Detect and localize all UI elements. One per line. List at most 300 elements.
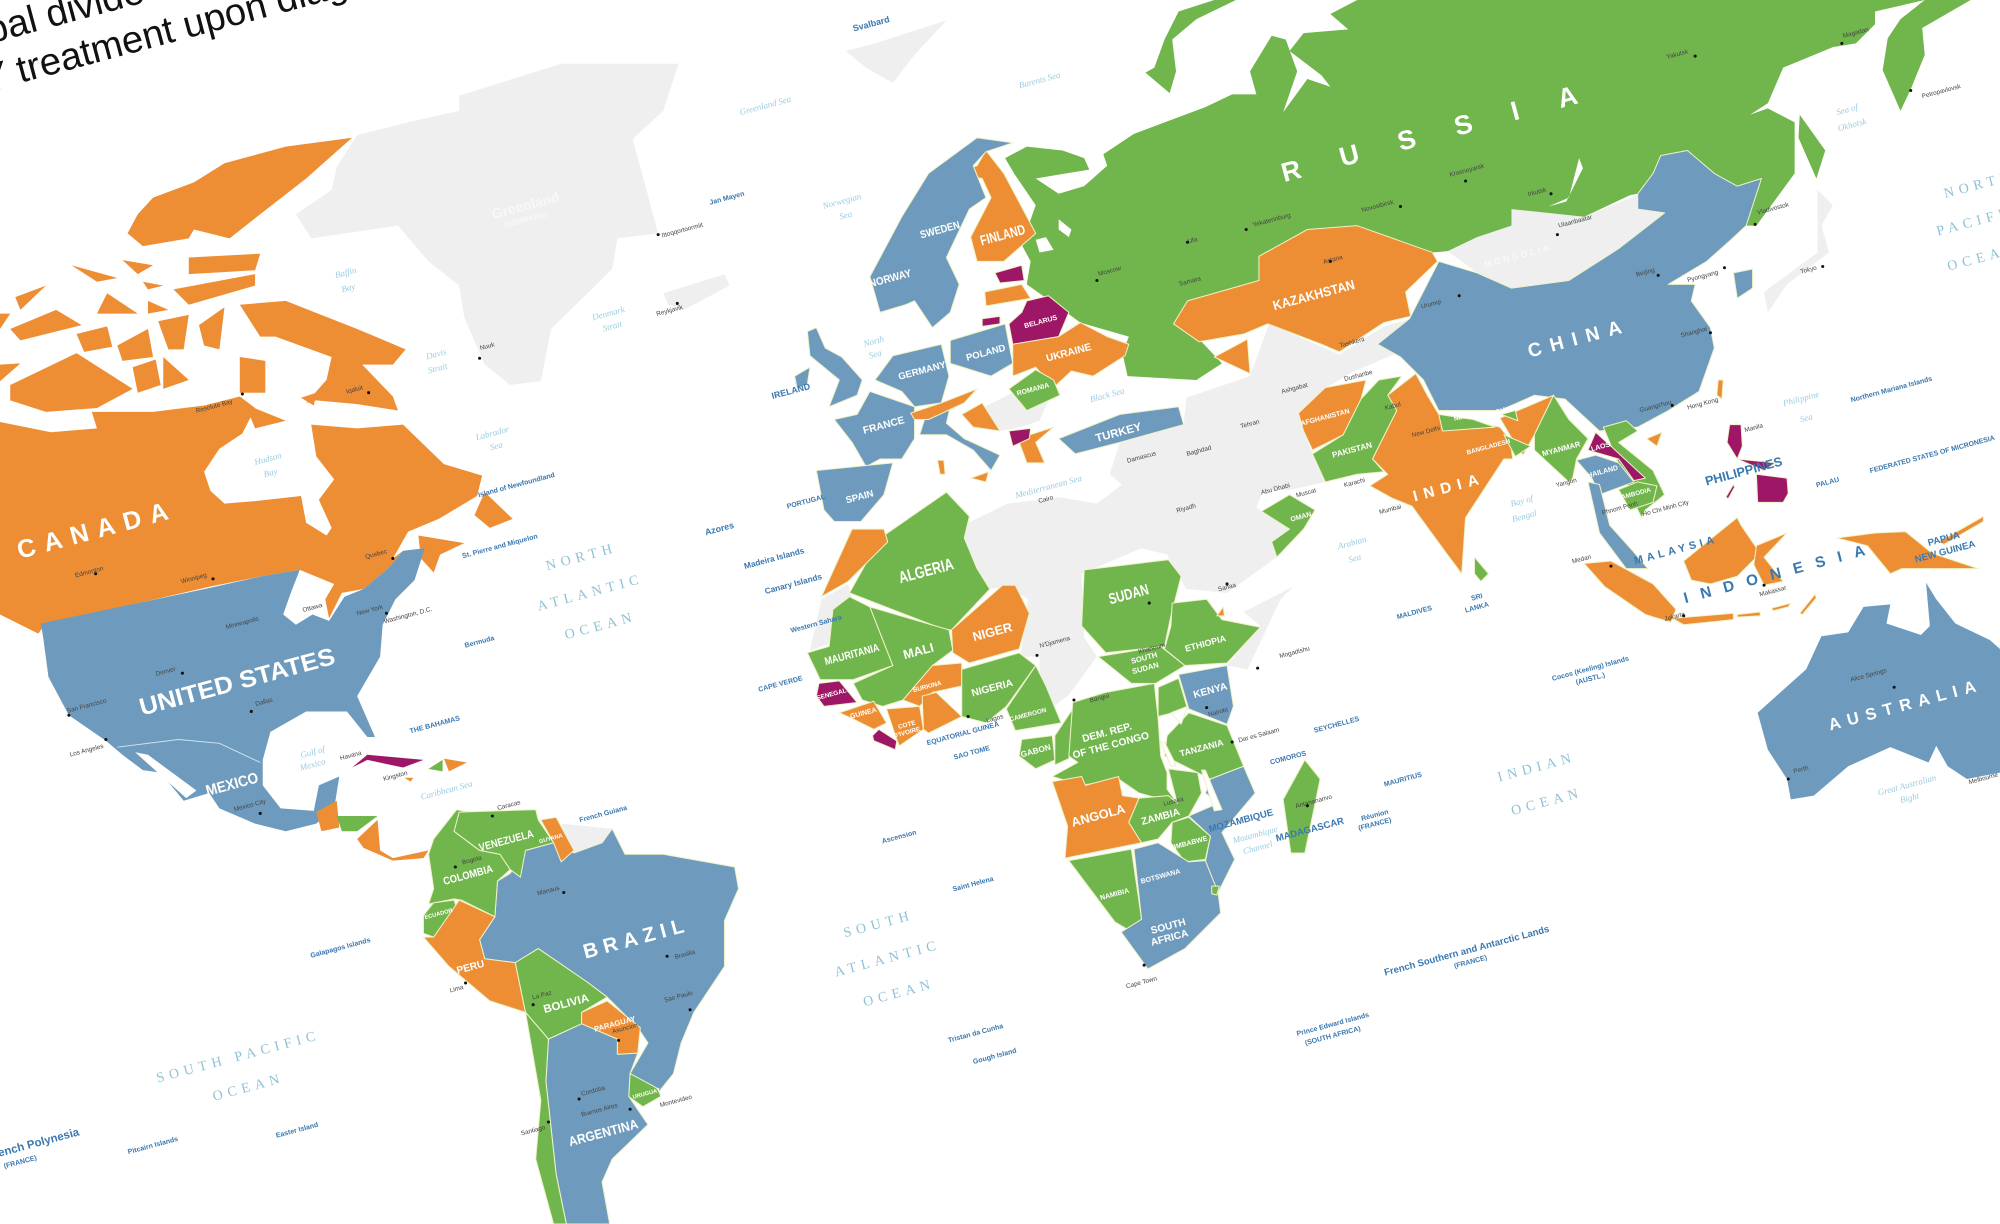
city labels: Bogota [461, 854, 483, 866]
sea and ocean labels: Sea [868, 347, 883, 361]
Corsica [938, 460, 945, 474]
sea and ocean labels: Sea [1347, 551, 1363, 565]
Greece [1018, 427, 1054, 463]
Sudan [1082, 560, 1181, 653]
city labels: Reykjavik [656, 304, 684, 318]
city labels: Nuuk [479, 341, 496, 352]
Kenya [1179, 666, 1233, 724]
blue external country labels: St. Pierre and Miquelon [462, 533, 538, 560]
blue external country labels: (FRANCE) [1453, 955, 1488, 970]
city labels: Tashkent [1339, 336, 1365, 349]
sea and ocean labels: North [861, 334, 886, 349]
sea and ocean labels: Barents Sea [1018, 69, 1062, 90]
city labels: Manila [1744, 422, 1764, 434]
city labels: Washington, D.C. [383, 606, 433, 625]
country name labels: OF THE CONGO [1072, 730, 1150, 761]
sea and ocean labels: Sea [489, 439, 504, 452]
city labels: Montevideo [659, 1094, 693, 1109]
city labels: Kingston [383, 770, 409, 783]
blue external country labels: Tristan da Cunha [947, 1023, 1004, 1045]
city labels: Lagos [986, 713, 1004, 724]
country name labels: D'IVOIRE [893, 726, 921, 740]
city labels: Cordoba [580, 1085, 606, 1098]
country name labels: RUSSIA [1278, 69, 1620, 188]
city labels: Winnipeg [180, 572, 208, 585]
Congo [1055, 709, 1073, 765]
blue external country labels: COMOROS [1270, 750, 1307, 767]
blue external country labels: IRELAND [770, 381, 812, 401]
country name labels: NEPAL [1453, 411, 1475, 423]
sea and ocean labels: OCEAN [563, 610, 638, 643]
country name labels: Greenland [490, 189, 561, 222]
country name labels: GUYANA [539, 833, 564, 845]
Ireland [795, 367, 810, 389]
city labels: Edmonton [74, 565, 105, 579]
Cambodia [1619, 482, 1657, 510]
country name labels: SUDAN [1107, 581, 1151, 608]
Angola [1052, 776, 1142, 858]
city labels: Denver [155, 666, 177, 678]
Caribbean [352, 755, 467, 782]
Kaliningrad [982, 316, 1000, 326]
city labels: Shanghai [1680, 326, 1708, 339]
city labels: Cape Town [1125, 975, 1158, 990]
country name labels: MAURITANIA [823, 642, 881, 668]
blue external country labels: SRI [1470, 593, 1484, 603]
city labels: Yakutsk [1666, 48, 1690, 61]
Djibouti [1217, 607, 1224, 616]
blue external country labels: Prince Edward Islands [1296, 1012, 1370, 1038]
country name labels: MYANMAR [1541, 439, 1582, 458]
blue external country labels: Madeira Islands [743, 546, 806, 571]
country name labels: ROMANIA [1016, 382, 1050, 398]
blue external country labels: Ascension [881, 829, 917, 845]
blue external country labels: Réunion [1361, 809, 1389, 823]
city labels: Astana [1322, 254, 1344, 266]
city labels: Baghdad [1186, 444, 1213, 458]
United Kingdom [807, 328, 862, 407]
Nigeria [962, 653, 1036, 723]
country name labels: MALI [901, 640, 935, 662]
blue external country labels: Azores [704, 520, 735, 537]
Taiwan [1717, 380, 1723, 399]
sea and ocean labels: Bay [340, 281, 356, 294]
United States and Mexico [41, 548, 425, 831]
city labels: Hong Kong [1687, 396, 1720, 412]
sea and ocean labels: Baffin [334, 265, 358, 280]
Bhutan [1501, 411, 1518, 421]
country name labels: AFRICA [1150, 928, 1190, 949]
country name labels: GABON [1020, 743, 1052, 759]
Africa [807, 492, 1320, 969]
US Mexico border [117, 740, 260, 762]
country name labels: SPAIN [845, 488, 875, 506]
sea and ocean labels: Sea of [1835, 101, 1860, 117]
sea and ocean labels: Mediterranean Sea [1013, 473, 1083, 500]
blue external country labels: Svalbard [852, 14, 891, 33]
country name labels: TURKEY [1094, 421, 1143, 445]
Norway and Sweden [870, 138, 1013, 328]
blue external country labels: Island of Newfoundland [478, 472, 556, 499]
Brazil [480, 829, 739, 1093]
blue external country labels: (AUSTL.) [1575, 672, 1606, 687]
blue external country labels: EQUATORIAL GUINEA [926, 721, 1000, 747]
Europe [795, 138, 1184, 521]
blue external country labels: (SOUTH AFRICA) [1304, 1026, 1361, 1047]
Indonesia and Papua New Guinea [1584, 516, 1983, 625]
west Kazakhstan strip [1214, 339, 1250, 374]
Madagascar [1283, 760, 1320, 853]
Balkans [962, 403, 1000, 431]
Mali [853, 607, 953, 706]
sea and ocean labels: Gulf of [299, 744, 327, 760]
Hainan [1647, 432, 1662, 446]
sea and ocean labels: SOUTH PACIFIC [155, 1028, 322, 1086]
Ecuador [423, 900, 457, 937]
Swaziland [1212, 886, 1219, 895]
Lake Victoria [1171, 706, 1188, 724]
Cameroon [1006, 666, 1061, 731]
city labels: Cairo [1038, 494, 1055, 505]
city labels: Bangui [1089, 693, 1110, 704]
sea and ocean labels: Strait [427, 361, 449, 375]
country name labels: ARGENTINA [567, 1116, 640, 1149]
sea and ocean labels [155, 69, 2000, 1105]
sea and ocean labels: Channel [1242, 839, 1274, 856]
Finland [950, 150, 1036, 261]
country name labels: AFGHANISTAN [1300, 408, 1351, 428]
city labels: Lima [449, 984, 465, 994]
country name labels: PARAGUAY [593, 1014, 636, 1034]
Kazakhstan [1173, 226, 1438, 352]
Senegal [816, 681, 857, 706]
blue external country labels: Easter Island [275, 1122, 319, 1140]
sea and ocean labels: Denmark [590, 304, 627, 323]
blue external country labels: MADAGASCAR [1275, 816, 1345, 844]
sea and ocean labels: Bay of [1509, 493, 1536, 509]
sea and ocean labels: Strait [601, 318, 624, 333]
Ethiopia [1165, 599, 1260, 666]
North America [0, 138, 513, 861]
country name labels: BURKINA [912, 680, 943, 694]
blue external country labels: FEDERATED STATES OF MICRONESIA [1869, 435, 1996, 475]
Bangladesh [1504, 435, 1531, 456]
city labels: Dallas [255, 697, 273, 708]
city labels: Quebec [365, 548, 389, 561]
Ghana Togo Benin [922, 692, 962, 733]
city labels: Melbourne [1968, 771, 1999, 786]
France [834, 391, 915, 467]
country name labels: AUSTRALIA [1826, 675, 1985, 734]
blue external country labels: Galapagos Islands [310, 937, 371, 960]
country name labels: BANGLADESH [1466, 438, 1511, 457]
sea and ocean labels: Norwegian [820, 191, 863, 211]
country name labels: ANGOLA [1070, 801, 1127, 830]
city labels: Ho Chi Minh City [1642, 499, 1691, 518]
sea and ocean labels: Philippine [1781, 389, 1820, 408]
China [1378, 150, 1761, 431]
city labels: Karachi [1343, 477, 1366, 489]
city labels: Guangzhou [1639, 399, 1673, 414]
city labels: Kabul [1384, 401, 1402, 412]
country name labels: URUGUAY [632, 1088, 661, 1101]
country name labels: SOUTH [1150, 917, 1187, 937]
country name labels: COLOMBIA [442, 863, 494, 888]
blue external country labels: Cocos (Keeling) Islands [1551, 655, 1630, 683]
country name labels: CANADA [14, 495, 180, 565]
country name labels: MEXICO [204, 770, 260, 800]
Namibia [1069, 849, 1142, 929]
city labels: Los Angeles [69, 743, 104, 759]
blue external country labels: French Guiana [579, 805, 628, 824]
sea and ocean labels: Bengal [1511, 508, 1538, 524]
sea and ocean labels: SOUTH [842, 908, 916, 941]
country name labels: SWEDEN [919, 219, 961, 241]
Colombia [429, 810, 510, 917]
country name labels: LAOS [1590, 441, 1611, 453]
country name labels: BHUTAN [1495, 402, 1523, 416]
Paraguay [582, 1001, 640, 1054]
city labels: Sanaa [1217, 582, 1237, 593]
city labels: New York [356, 604, 385, 617]
city labels: Khartoum [1138, 642, 1166, 656]
city labels: Medan [1571, 554, 1592, 565]
country name labels: BELARUS [1024, 315, 1058, 330]
sea and ocean labels: Greenland Sea [738, 94, 793, 117]
city labels: Magadan [1842, 26, 1870, 40]
country name labels: ALGERIA [896, 554, 956, 587]
Argentina [546, 1024, 648, 1224]
Zimbabwe [1171, 817, 1210, 862]
blue external country labels: MAURITIUS [1383, 772, 1423, 789]
Pakistan [1312, 376, 1402, 482]
sea and ocean labels: Great Australian [1877, 772, 1938, 798]
Oman [1261, 495, 1315, 557]
city labels: Irkutsk [1527, 186, 1548, 198]
Lake Malawi [1202, 770, 1222, 811]
city labels: Antananarivo [1295, 793, 1333, 810]
blue external country labels: (FRANCE) [3, 1155, 38, 1170]
sea and ocean labels: Sea [1799, 411, 1814, 424]
country name labels: SUDAN [1131, 660, 1160, 676]
country name labels: OMAN [1290, 511, 1312, 524]
blue external country labels: Pitcairn Islands [127, 1136, 179, 1156]
blue external country labels: CAPE VERDE [758, 675, 804, 694]
Estonia [995, 265, 1024, 283]
blue external country labels: MALAYSIA [1633, 533, 1719, 567]
blue external country labels: Saint Helena [952, 876, 995, 893]
Guinea [839, 701, 886, 729]
country name labels: CAMBODIA [1616, 487, 1652, 502]
sea and ocean labels: Bight [1899, 790, 1921, 805]
city labels: Dar es Salaam [1238, 727, 1280, 744]
city labels: Tehran [1240, 418, 1261, 430]
country name labels: TANZANIA [1179, 737, 1225, 759]
country name labels: CHINA [1526, 315, 1633, 362]
Ivory Coast [886, 706, 923, 746]
city labels: Tokyo [1800, 264, 1818, 276]
no-data countries in grey [296, 20, 1833, 853]
country name labels: BOLIVIA [542, 992, 590, 1016]
city labels: Asuncion [611, 1022, 639, 1036]
Nepal [1439, 414, 1495, 431]
city labels: Resolute Bay [195, 398, 234, 415]
country name labels: GUINEA [849, 707, 878, 721]
city labels: Samara [1178, 275, 1202, 288]
city labels: Urumqi [1420, 298, 1442, 311]
Mauritania [807, 597, 893, 680]
city labels: Mogadishu [1279, 645, 1311, 660]
Sri Lanka [1474, 557, 1489, 581]
country name labels: CAMEROON [1009, 707, 1048, 723]
sea and ocean labels: Hudson [252, 450, 283, 467]
country name labels: ETHIOPIA [1184, 633, 1228, 654]
country name labels: VENEZUELA [478, 828, 535, 854]
South America [423, 810, 739, 1224]
country name labels: NIGERIA [970, 678, 1015, 699]
country name labels: UKRAINE [1045, 342, 1093, 365]
blue external country labels: PHILIPPINES [1703, 454, 1784, 489]
Thailand [1577, 455, 1634, 495]
blue external country labels: Gough Island [972, 1048, 1017, 1066]
Algeria and Tunisia [849, 492, 990, 630]
Liberia [872, 729, 897, 750]
Italy [920, 407, 1000, 470]
Lake Tanganyika [1161, 742, 1176, 766]
Uganda [1158, 678, 1188, 717]
country name labels: PERU [456, 959, 486, 977]
sea and ocean labels: Mozambique [1231, 824, 1279, 846]
sea and ocean labels: NORTH [544, 541, 619, 574]
city labels: Perth [1793, 764, 1810, 775]
Mozambique [1189, 766, 1255, 892]
country name labels: SENEGAL [816, 687, 847, 702]
Sicily [971, 472, 989, 482]
city labels: Novosibirsk [1361, 199, 1395, 214]
country name labels: ZAMBIA [1140, 807, 1182, 828]
sea and ocean labels: ATLANTIC [833, 938, 943, 981]
Uruguay [629, 1074, 661, 1107]
city labels: Jakarta [1664, 611, 1686, 623]
sea and ocean labels: Okhotsk [1837, 116, 1868, 133]
northeast India [1500, 395, 1554, 455]
sea and ocean labels: Sea [838, 208, 854, 222]
Laos [1588, 432, 1645, 481]
Spain [816, 463, 893, 521]
Germany and Benelux [875, 344, 949, 407]
city labels: Petropavlovsk [1921, 83, 1962, 100]
country name labels: KENYA [1192, 681, 1229, 701]
sea and ocean labels: Black Sea [1089, 385, 1126, 404]
city labels: New Delhi [1411, 425, 1441, 439]
city labels: Riyadh [1176, 502, 1197, 515]
city labels: Phnom Penh [1601, 500, 1639, 517]
city labels: Ufa [1187, 236, 1199, 245]
blue external country labels: Jan Mayen [709, 191, 745, 207]
blue external country labels: Bermuda [464, 635, 495, 650]
Bolivia [515, 949, 607, 1039]
city labels: Ottawa [302, 602, 324, 614]
city labels: Ulaanbaatar [1558, 214, 1594, 230]
Russia [1005, 0, 1971, 380]
Chile [526, 1012, 566, 1224]
blue external country labels: Canary Islands [764, 572, 823, 596]
Morocco [821, 529, 888, 597]
blue external country labels: SEYCHELLES [1313, 716, 1361, 735]
city labels: Krasnoyarsk [1449, 163, 1486, 179]
country name labels: BRAZIL [581, 914, 692, 964]
Latvia [985, 284, 1031, 306]
country name labels: ECUADOR [424, 908, 454, 921]
sea and ocean labels: ATLANTIC [536, 572, 645, 615]
city labels: Yekaterinburg [1252, 212, 1292, 229]
city labels: La Paz [532, 990, 553, 1001]
city labels: Nairobi [1207, 707, 1229, 718]
Canada mainland and islands [0, 138, 513, 634]
country name labels: POLAND [965, 343, 1007, 364]
Afghanistan [1298, 380, 1366, 450]
blue external country labels: PAPUA [1927, 530, 1961, 549]
city labels: Pyongyang [1687, 269, 1720, 284]
Zambia [1129, 769, 1202, 843]
country name labels: BOTSWANA [1140, 868, 1181, 886]
city labels: Damascus [1126, 450, 1157, 465]
Central America [316, 801, 429, 861]
Albania and Macedonia [1009, 428, 1031, 446]
city labels: Alice Springs [1850, 667, 1887, 684]
country name labels: GERMANY [897, 359, 948, 383]
South Korea [1733, 269, 1753, 298]
blue external country labels: INDONESIA [1682, 539, 1879, 607]
sea and ocean labels: OCEAN [1510, 786, 1585, 819]
blue external country labels: LANKA [1464, 601, 1490, 615]
sea and ocean labels: Davis [424, 346, 448, 362]
city labels: Iqaluit [345, 384, 364, 396]
Poland [950, 324, 1013, 376]
city labels: Vladivostok [1756, 201, 1790, 217]
Botswana and South Africa [1121, 843, 1221, 969]
Guyana [541, 817, 574, 862]
country name labels: PAKISTAN [1331, 440, 1373, 460]
South Sudan [1098, 646, 1185, 683]
city labels: Havana [339, 750, 363, 762]
Ukraine [1013, 323, 1129, 388]
Venezuela [454, 810, 554, 877]
city labels: Buenos Aires [580, 1102, 619, 1119]
city labels: Sao Paulo [663, 990, 694, 1004]
blue external country labels: Northern Mariana Islands [1850, 376, 1933, 404]
Malay peninsula [1588, 482, 1648, 569]
sea and ocean labels: Mexico [298, 756, 327, 773]
Philippines [1726, 425, 1788, 502]
country name labels: FRANCE [862, 415, 906, 437]
blue external country labels: MOZAMBIQUE [1208, 807, 1275, 835]
blue external country labels: PALAU [1816, 477, 1840, 489]
sea and ocean labels: Caribbean Sea [419, 778, 474, 802]
sea and ocean labels: Bay [262, 466, 278, 479]
Gabon [1019, 736, 1055, 769]
Myanmar [1534, 395, 1588, 482]
blue external country labels: THE BAHAMAS [409, 715, 461, 735]
Vietnam [1603, 421, 1665, 518]
city labels: San Francisco [66, 697, 108, 715]
city labels: Muscat [1295, 487, 1317, 499]
blue external country labels: SAO TOME [953, 745, 991, 762]
Belarus [1009, 296, 1069, 344]
country name labels: NORWAY [868, 267, 913, 290]
country name labels: DEM. REP. [1081, 721, 1133, 745]
blue external country labels: French Southern and Antarctic Lands [1383, 924, 1551, 979]
